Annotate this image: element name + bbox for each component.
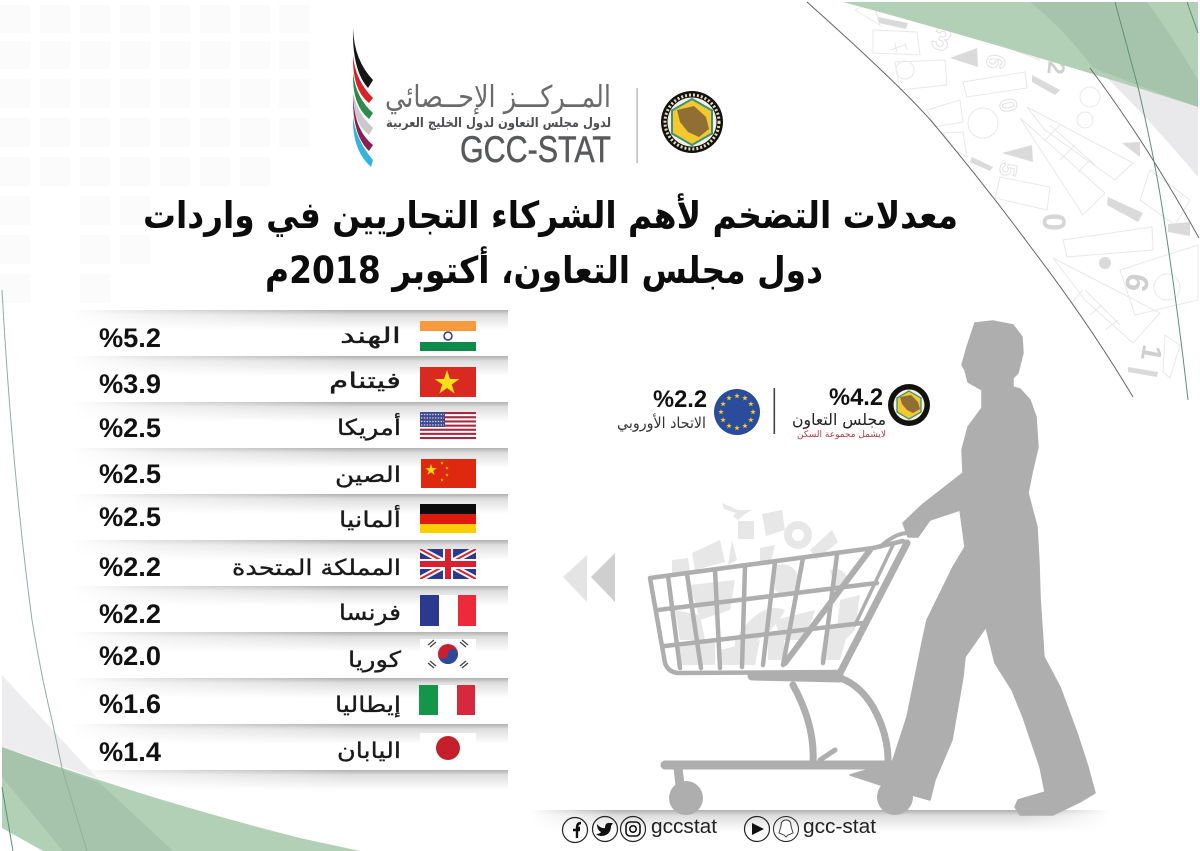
curved thin lines top-right: [807, 2, 1199, 400]
logo GCC-STAT wordmark: GCC-STAT: [460, 129, 611, 170]
row: United Kingdom: المملكة المتحدة: [232, 556, 401, 581]
row: Italy: إيطاليا: [335, 693, 401, 718]
row: France: [99, 595, 476, 629]
handle gccstat: gccstat: [651, 816, 717, 838]
stat: GCC: [792, 384, 930, 440]
decorative pattern top-right: 6: [1118, 271, 1156, 295]
decorative pattern top-right: 0: [1036, 213, 1072, 231]
EU label: الاتحاد الأوروبي: [617, 413, 706, 433]
background square grid top-left: [0, 5, 309, 303]
row: Japan: %1.4: [99, 737, 161, 767]
row: United Kingdom: [99, 549, 476, 582]
row: Korea: %2.0: [99, 641, 161, 671]
row: China: [99, 459, 476, 489]
decorative pattern top-right: 3: [927, 19, 956, 59]
GCC note: لايشمل مجموعة السكن: [797, 430, 886, 440]
stat: EU: [617, 386, 760, 435]
row: Korea: [99, 639, 476, 673]
EU value: %2.2: [653, 386, 707, 413]
row: Vietnam: فيتنام: [329, 369, 401, 394]
GCC emblem: [661, 91, 723, 153]
row: Germany: %2.5: [99, 502, 161, 532]
cart wheels: [669, 779, 913, 815]
decorative pattern top-right: [855, 2, 1198, 378]
logo Arabic subtitle: لدول مجلس التعاون لدول الخليج العربية: [386, 116, 611, 131]
double arrow chevrons: [563, 553, 615, 602]
small GCC emblem: [888, 384, 930, 426]
icon: instagram: [620, 816, 646, 842]
pale products icons in cart: [672, 503, 860, 665]
row: France: %2.2: [99, 599, 161, 629]
row: Germany: [99, 502, 476, 533]
inflation table: [99, 321, 476, 767]
shopping cart: [650, 533, 913, 815]
green band bottom-left: [2, 290, 360, 851]
icon: facebook: [562, 818, 588, 842]
row: United Kingdom: %2.2: [99, 552, 161, 582]
handle gcc-stat: gcc-stat: [803, 816, 876, 838]
decorative pattern top-right: 0: [993, 97, 1022, 114]
cart base: [665, 676, 893, 785]
green band top-right: [843, 2, 1198, 177]
title line 2: دول مجلس التعاون، أكتوبر 2018م: [265, 246, 823, 293]
title line 1: معدلات التضخم لأهم الشركاء التجاريين في واردات: [143, 192, 958, 237]
social footer: [562, 816, 876, 842]
decorative pattern top-right: 6: [980, 52, 1012, 72]
row: Korea: كوريا: [348, 648, 402, 673]
row: Germany: ألمانيا: [339, 505, 401, 533]
cart basket: [650, 533, 908, 673]
EU flag circle: [714, 389, 760, 435]
row: China: الصين: [335, 463, 401, 488]
GCC label: مجلس التعاون: [792, 410, 886, 430]
logo divider: [636, 88, 638, 163]
GCC value: %4.2: [829, 384, 883, 411]
icon: twitter: [592, 816, 618, 842]
row: Italy: %1.6: [99, 689, 161, 719]
decorative pattern top-right: 5: [993, 161, 1022, 178]
row: USA: %2.5: [99, 413, 161, 443]
row: India: %5.2: [99, 323, 161, 353]
row shadows: [70, 310, 508, 790]
person silhouette: [850, 321, 1095, 815]
title: [143, 192, 958, 293]
row: India: [99, 321, 476, 353]
footer shadow bar: [540, 810, 1100, 828]
row: France: فرنسا: [339, 601, 401, 626]
row: Vietnam: %3.9: [99, 369, 161, 399]
row: Italy: [99, 685, 475, 719]
logo Arabic name: المــركـــز الإحــصائي: [385, 80, 611, 115]
icon: youtube: [744, 816, 770, 842]
decorative pattern top-right: 2: [1041, 60, 1070, 76]
row: China: %2.5: [99, 459, 161, 489]
logo feathers: [353, 28, 373, 167]
decorative pattern top-right: 1: [1135, 343, 1168, 363]
row: Vietnam: [99, 367, 476, 399]
logo: GCC-STAT: [353, 28, 611, 170]
row: USA: [99, 412, 476, 443]
row: Japan: [99, 733, 476, 767]
row: Japan: اليابان: [337, 739, 401, 764]
row: India: الهند: [340, 324, 401, 349]
icon: snapchat: [774, 816, 798, 842]
stat divider: [774, 388, 775, 434]
row: USA: أمريكا: [337, 413, 401, 441]
